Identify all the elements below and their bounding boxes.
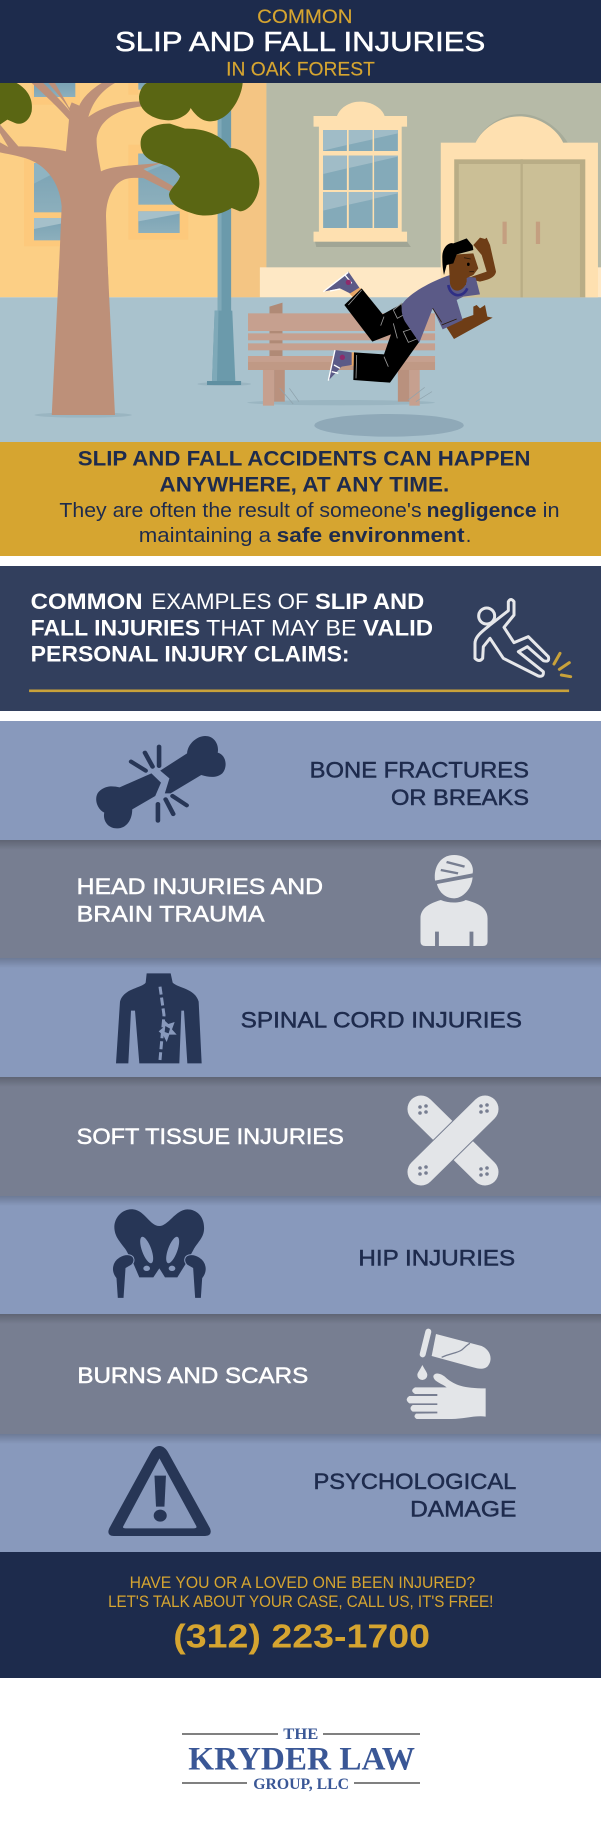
label: bone fractures: OR BREAKS [391, 785, 529, 810]
tree crown and branches [0, 83, 259, 283]
center window [314, 102, 411, 247]
intro heading: PERSONAL INJURY CLAIMS: [31, 642, 350, 667]
header banner [0, 0, 601, 83]
label: bone fractures: BONE FRACTURES [310, 758, 529, 783]
phone number: (312) 223-1700 [173, 1618, 430, 1654]
label: head injuries: BRAIN TRAUMA [77, 902, 265, 927]
label: head injuries [77, 874, 323, 927]
row: head injuries [0, 840, 601, 958]
icon: chemical on hand [407, 1332, 491, 1419]
lamp post [197, 100, 251, 386]
title location: IN OAK FOREST [226, 59, 375, 81]
logo: The Kryder Law Group: GROUP, LLC [253, 1776, 349, 1793]
gold statement panel [0, 442, 601, 556]
intro heading: FALL INJURIES [31, 616, 200, 641]
icon: bandaged head [420, 855, 488, 946]
icon: person slipping [475, 599, 571, 677]
tree trunk base [34, 267, 132, 418]
call to action text [108, 1574, 493, 1611]
icon: pelvis [112, 1209, 206, 1298]
label: burns: BURNS AND SCARS [77, 1363, 308, 1388]
row: spinal cord [0, 958, 601, 1077]
intro heading: VALID [363, 616, 433, 641]
statement heading: ANYWHERE, AT ANY TIME. [160, 474, 449, 497]
statement body: safe environment [277, 525, 465, 547]
label: psychological damage: DAMAGE [410, 1497, 516, 1522]
icon: torso with spine [116, 973, 202, 1063]
title kicker: COMMON [257, 6, 353, 28]
call to action text: HAVE YOU OR A LOVED ONE BEEN INJURED? [130, 1574, 475, 1592]
intro heading: THAT MAY BE [206, 616, 356, 641]
row: psychological damage [0, 1434, 601, 1552]
statement heading [78, 448, 531, 497]
call to action text: LET'S TALK ABOUT YOUR CASE, CALL US, IT'S FREE! [108, 1593, 493, 1611]
row: burns and scars [0, 1314, 601, 1434]
intro heading: SLIP AND [315, 589, 424, 614]
title: SLIP AND FALL INJURIES [115, 26, 485, 57]
icon: warning triangle [108, 1446, 211, 1536]
bench [247, 303, 435, 406]
row: soft tissue [0, 1077, 601, 1196]
statement body: They are often the result of someone's [59, 500, 422, 522]
door [441, 114, 598, 297]
label: psychological damage: PSYCHOLOGICAL [314, 1469, 516, 1494]
statement body: . [466, 525, 471, 547]
statement body [59, 500, 560, 547]
label: psychological damage [314, 1469, 516, 1522]
statement body: in [543, 500, 560, 522]
logo: The Kryder Law Group: KRYDER LAW [188, 1741, 415, 1777]
statement heading: SLIP AND FALL ACCIDENTS CAN HAPPEN [78, 448, 531, 471]
label: head injuries: HEAD INJURIES AND [77, 874, 323, 899]
logo: The Kryder Law Group: THE [283, 1726, 318, 1743]
hero illustration: man falling over a bench on a street [0, 83, 601, 442]
ground shadow [314, 414, 464, 437]
label: soft tissue: SOFT TISSUE INJURIES [77, 1124, 344, 1149]
icon: broken bone [96, 736, 226, 828]
intro heading [31, 589, 433, 667]
label: bone fractures [310, 758, 529, 810]
call to action footer [0, 1552, 601, 1678]
statement body: maintaining a [139, 525, 272, 547]
left building windows [24, 83, 188, 246]
navy intro panel [0, 566, 601, 711]
icon: crossed bandages [418, 1103, 489, 1177]
falling man [323, 238, 496, 383]
intro heading: EXAMPLES OF [151, 589, 309, 614]
label: spinal cord: SPINAL CORD INJURIES [241, 1008, 522, 1033]
label: hip: HIP INJURIES [358, 1246, 515, 1271]
row: hip [0, 1196, 601, 1314]
row: bone fractures [0, 721, 601, 840]
logo: The Kryder Law Group [182, 1726, 420, 1793]
gold divider [29, 690, 569, 692]
intro heading: COMMON [31, 589, 143, 614]
statement body: negligence [427, 500, 537, 522]
